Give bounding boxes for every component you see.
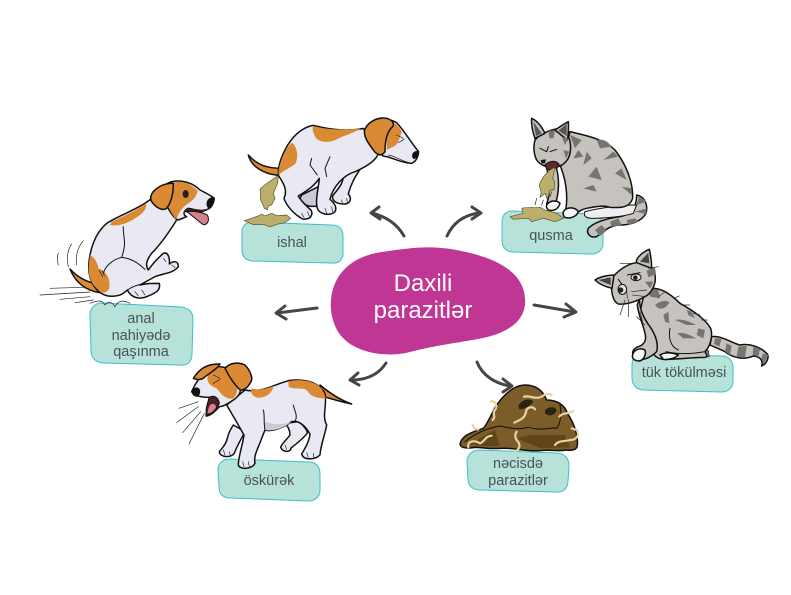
illustration: coughing dog	[177, 363, 352, 468]
illustration: feces with parasites	[460, 385, 578, 451]
label: anal nahiyədə qaşınma: nahiyədə	[112, 328, 170, 344]
label: tük tökülməsi	[632, 354, 733, 392]
arrow to qusma	[447, 207, 481, 236]
illustration: vomiting cat	[510, 118, 647, 237]
label: öskürək	[218, 459, 320, 501]
label: anal nahiyədə qaşınma: anal	[127, 311, 155, 327]
central blob: Daxili parazitlər: Daxili	[394, 270, 452, 297]
arrow to anal nahiyədə qaşınma	[276, 306, 317, 319]
illustration: dog with diarrhea	[244, 118, 419, 227]
label: öskürək: öskürək	[244, 473, 295, 489]
label: nəcisdə parazitlər: parazitlər	[488, 473, 548, 489]
arrow to ishal	[371, 207, 404, 236]
label: anal nahiyədə qaşınma	[90, 303, 193, 365]
label: ishal: ishal	[277, 235, 307, 251]
label: tük tökülməsi: tük tökülməsi	[642, 365, 726, 381]
arrow to tük tökülməsi	[534, 304, 576, 317]
central blob: Daxili parazitlər: parazitlər	[374, 297, 472, 324]
label: qusma: qusma	[529, 228, 574, 244]
label: nəcisdə parazitlər: nəcisdə	[493, 456, 543, 472]
label: nəcisdə parazitlər	[467, 450, 569, 492]
illustration: cat losing fur	[595, 249, 768, 366]
label: qusma	[502, 211, 603, 254]
label: anal nahiyədə qaşınma: qaşınma	[113, 344, 170, 360]
arrow to nəcisdə parazitlər	[477, 362, 512, 392]
central blob: Daxili parazitlər	[331, 247, 525, 354]
label: ishal	[242, 222, 343, 263]
arrow to öskürək	[350, 363, 386, 385]
illustration: dog scratching on the ground	[40, 181, 215, 307]
